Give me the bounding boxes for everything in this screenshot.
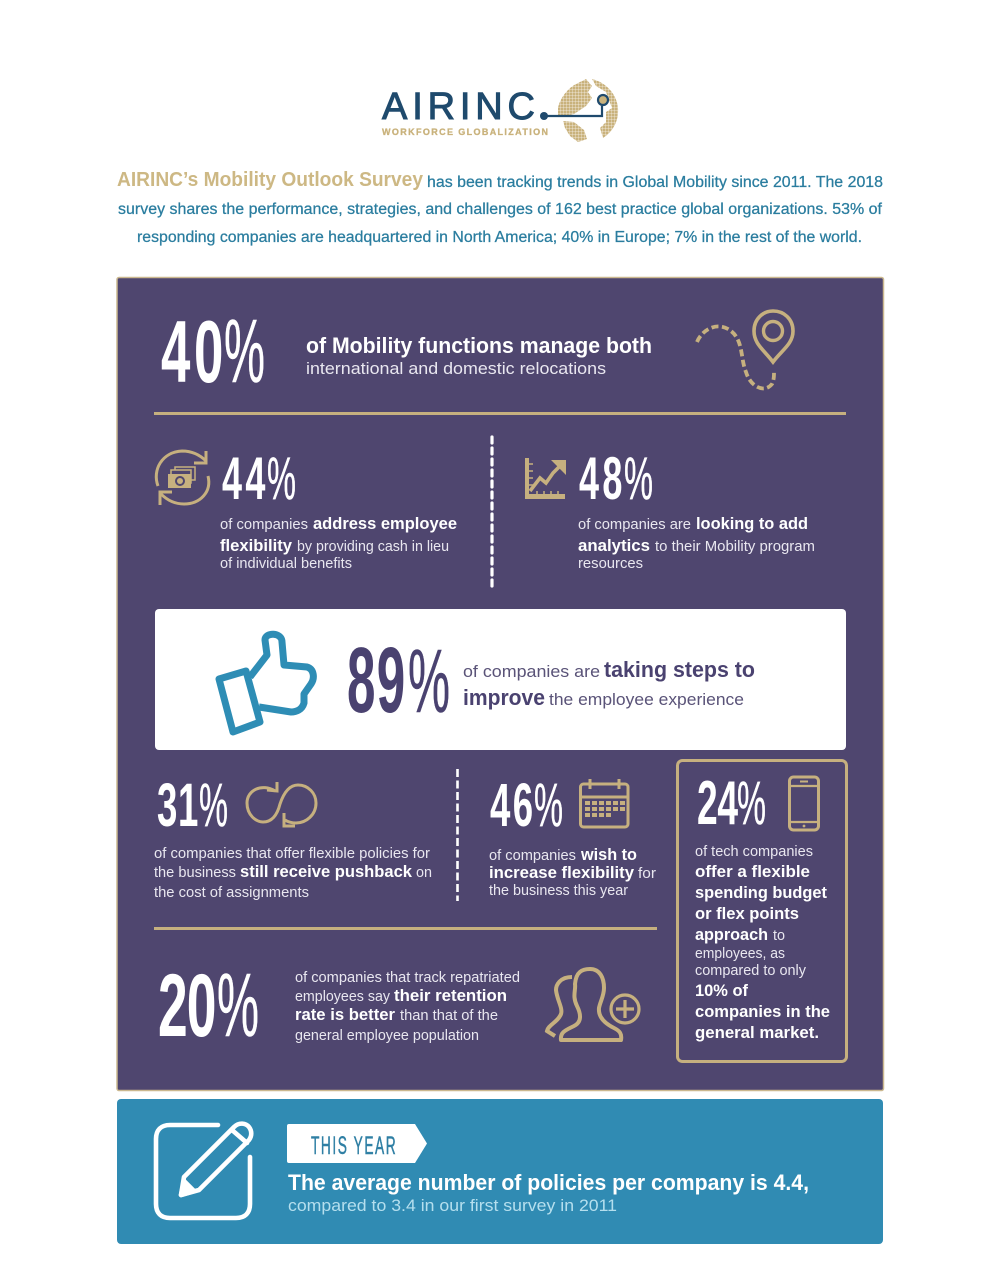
- 31 percent description: the cost of assignments: [154, 884, 309, 901]
- label tag: [287, 1124, 427, 1163]
- icon: calendar: [580, 779, 628, 827]
- 24 percent description: general market.: [695, 1023, 819, 1042]
- 24 percent description: to: [773, 927, 785, 944]
- intro line 3: responding companies are headquartered in North America; 40% in Europe; 7% in the rest of the world.: [137, 229, 862, 246]
- icon: rising chart: [525, 458, 566, 499]
- divider: lower gold line: [154, 927, 657, 930]
- 89 percent description: [463, 657, 755, 710]
- 24 percent description: approach: [695, 925, 768, 944]
- icon: people with plus: [547, 969, 639, 1040]
- panel: 24 percent framed: [678, 760, 846, 1062]
- 44 percent description: flexibility: [220, 536, 293, 555]
- 31 percent description: on: [416, 864, 432, 881]
- 40 percent description: [306, 333, 652, 378]
- 20 percent description: of companies that track repatriated: [295, 969, 520, 986]
- panel: 89 percent callout: [155, 609, 846, 750]
- 24 percent description: companies in the: [695, 1002, 830, 1021]
- 40 percent description: of Mobility functions manage both: [306, 333, 652, 358]
- number 89%: [347, 628, 450, 732]
- 44 percent description: by providing cash in lieu: [297, 538, 449, 555]
- 20 percent description: rate is better: [295, 1005, 395, 1024]
- number 40%: 40: [161, 303, 223, 401]
- number 24%: %: [737, 769, 766, 837]
- 24 percent description: or flex points: [695, 904, 799, 923]
- number 31%: %: [199, 771, 228, 839]
- 89 percent description: taking steps to: [604, 657, 755, 682]
- 20 percent description: [295, 969, 520, 1044]
- 40 percent description: international and domestic relocations: [306, 359, 606, 378]
- logo tagline: WORKFORCE GLOBALIZATION: [382, 127, 548, 137]
- 44 percent description: address employee: [313, 514, 457, 533]
- 44 percent description: [220, 514, 457, 572]
- 20 percent description: than that of the: [400, 1007, 498, 1024]
- 24 percent description: spending budget: [695, 883, 827, 902]
- icon: pencil and square: [156, 1124, 251, 1218]
- 46 percent description: increase flexibility: [489, 863, 635, 882]
- 24 percent description: offer a flexible: [695, 862, 810, 881]
- 89 percent description: of companies are: [463, 662, 600, 681]
- logo globe: [540, 79, 618, 142]
- 24 percent description: of tech companies: [695, 843, 813, 860]
- 46 percent description: of companies: [489, 847, 576, 864]
- logo wordmark: AIRINC: [382, 86, 535, 128]
- intro line 1: has been tracking trends in Global Mobility since 2011. The 2018: [427, 174, 883, 191]
- intro line 2: survey shares the performance, strategies, and challenges of 162 best practice global organizations. 53% of: [118, 201, 883, 218]
- number 44%: [222, 445, 296, 512]
- stat: 46 percent: [489, 770, 656, 899]
- 20 percent description: general employee population: [295, 1027, 479, 1044]
- icon: thumbs up: [219, 634, 313, 732]
- number 31%: 31: [157, 770, 198, 839]
- 31 percent description: [154, 845, 432, 901]
- 46 percent description: [489, 845, 656, 899]
- divider: dotted vertical: [490, 437, 494, 588]
- 24 percent description: compared to only: [695, 962, 806, 979]
- icon: cash with circular arrows: [156, 451, 209, 505]
- 24 percent description: 10% of: [695, 981, 748, 1000]
- number 48%: 48: [579, 446, 622, 512]
- number 44%: 44: [222, 446, 266, 512]
- 46 percent description: for: [638, 865, 656, 882]
- number 48%: [579, 445, 653, 512]
- 48 percent description: to their Mobility program: [655, 538, 815, 555]
- number 89%: %: [408, 632, 450, 732]
- 31 percent description: the business: [154, 864, 236, 881]
- number 46%: %: [534, 771, 563, 839]
- logo: [382, 79, 618, 142]
- number 20%: 20: [158, 956, 216, 1055]
- 31 percent description: of companies that offer flexible policies for: [154, 845, 430, 862]
- number 31%: [157, 770, 228, 839]
- stat: 44 percent: [156, 445, 457, 572]
- 24 percent description: [695, 843, 830, 1042]
- icon: location pin with dashed route: [697, 311, 793, 388]
- 46 percent description: wish to: [580, 845, 637, 864]
- 48 percent description: looking to add: [696, 514, 808, 533]
- number 24%: [697, 768, 766, 837]
- this year statement: The average number of policies per company is 4.4,: [288, 1170, 809, 1195]
- 46 percent description: the business this year: [489, 882, 628, 899]
- panel: purple statistics: [117, 278, 884, 1090]
- divider: top gold line: [154, 412, 846, 415]
- stat: 48 percent: [525, 445, 815, 572]
- number 20%: %: [217, 956, 259, 1056]
- 48 percent description: [578, 514, 815, 572]
- this year comparison: compared to 3.4 in our first survey in 2011: [288, 1196, 617, 1215]
- stat: 40 percent: [161, 302, 793, 402]
- 20 percent description: their retention: [394, 986, 507, 1005]
- stat: 20 percent: [158, 956, 639, 1056]
- number 89%: 89: [347, 628, 405, 732]
- intro text: [117, 169, 883, 246]
- number 46%: 46: [490, 770, 533, 839]
- number 20%: [158, 956, 259, 1056]
- 24 percent description: employees, as: [695, 945, 785, 962]
- 20 percent description: employees say: [295, 988, 390, 1005]
- number 24%: 24: [697, 768, 739, 837]
- 48 percent description: of companies are: [578, 516, 691, 533]
- number 48%: %: [624, 445, 653, 512]
- number 40%: %: [224, 302, 265, 402]
- survey name: AIRINC’s Mobility Outlook Survey: [117, 169, 424, 191]
- 89 percent description: improve: [463, 685, 545, 710]
- 89 percent description: the employee experience: [549, 690, 744, 709]
- number 46%: [490, 770, 563, 839]
- number 40%: [161, 302, 265, 402]
- icon: smartphone: [790, 777, 818, 830]
- stat: 31 percent: [154, 770, 432, 901]
- icon: looping arrows: [247, 782, 316, 826]
- 31 percent description: still receive pushback: [240, 862, 413, 881]
- label tag: THIS YEAR: [311, 1133, 396, 1160]
- 44 percent description: of companies: [220, 516, 308, 533]
- panel: this year: [117, 1099, 883, 1244]
- divider: dashed vertical: [456, 769, 459, 901]
- 44 percent description: of individual benefits: [220, 555, 352, 572]
- number 44%: %: [267, 445, 296, 512]
- 48 percent description: resources: [578, 555, 643, 572]
- 48 percent description: analytics: [578, 536, 650, 555]
